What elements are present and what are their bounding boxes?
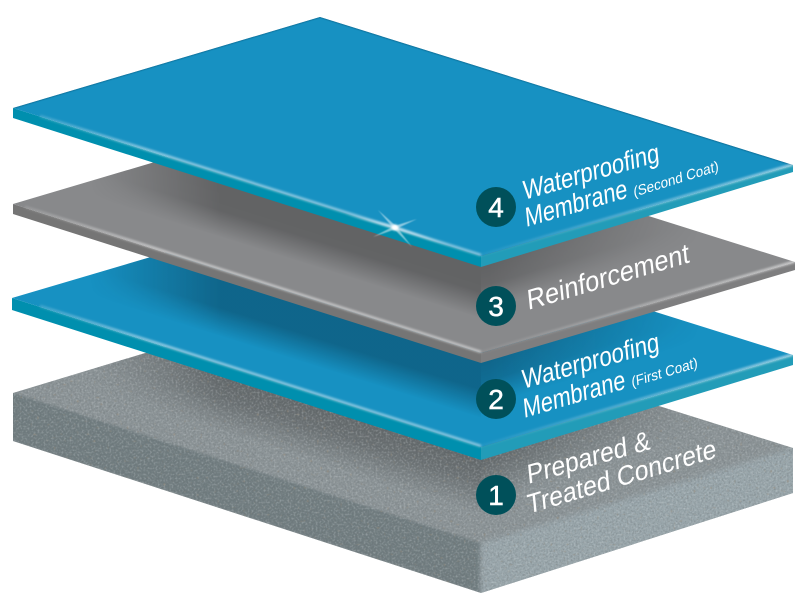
badge: number 4	[476, 187, 516, 227]
label: layer 4 waterproofing membrane second coat: (Second Coat)	[633, 159, 719, 201]
label: layer 2 waterproofing membrane first coat: (First Coat)	[631, 355, 698, 391]
badge: number 3: 3	[488, 291, 504, 322]
layer 1: prepared and treated concrete slab	[13, 346, 793, 593]
badge: number 3	[476, 286, 516, 326]
label: layer 1 prepared and treated concrete: Treated Concrete	[526, 433, 718, 520]
label: layer 4 waterproofing membrane second coat: Membrane	[524, 173, 629, 233]
label: layer 1 prepared and treated concrete: Prepared &	[526, 424, 652, 490]
badge: number 1: 1	[488, 480, 504, 511]
badge: number 1	[476, 475, 516, 515]
icon: sparkle highlight	[345, 210, 450, 247]
label: layer 2 waterproofing membrane first coat	[521, 326, 698, 424]
label: layer 2 waterproofing membrane first coat: Waterproofing	[521, 326, 661, 395]
label: layer 2 waterproofing membrane first coat: Membrane	[522, 364, 627, 424]
badge: number 2	[476, 379, 516, 419]
layer 2: first coat waterproofing membrane slab	[12, 252, 793, 460]
badge: number 2: 2	[488, 384, 504, 415]
layer 4: second coat waterproofing membrane slab	[13, 17, 793, 267]
label: layer 4 waterproofing membrane second coat	[522, 137, 719, 233]
layer 3: reinforcement slab	[13, 158, 795, 363]
label: layer 3 reinforcement: Reinforcement	[526, 238, 691, 317]
badge: number 4: 4	[488, 192, 504, 223]
label: layer 4 waterproofing membrane second coat: Waterproofing	[522, 137, 661, 206]
